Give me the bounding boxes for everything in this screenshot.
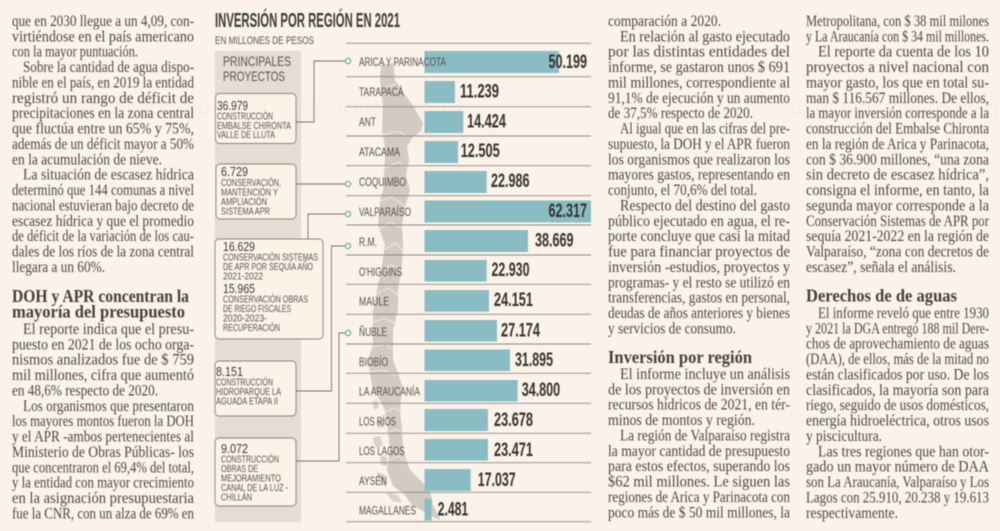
callout: Valparaíso projects: 2020-2023-: [223, 312, 267, 324]
region labels: LOS RÍOS: [359, 414, 396, 428]
bar values: 14.424: [467, 112, 506, 132]
bar values: 22.930: [492, 260, 530, 281]
bar values: 62.317: [548, 201, 587, 222]
callout: Canal de la Luz: [215, 438, 296, 506]
body text: column 1 upper: registró un rango de déficit de: [12, 90, 194, 107]
body text: column 3 upper: conjunto, el 70,6% del total.: [608, 182, 757, 199]
region labels: ANT: [359, 115, 376, 129]
body text: column 3 upper: Respecto del destino del gasto: [620, 197, 790, 214]
body text: column 1 upper: nacional estuvieran bajo decreto de: [12, 197, 194, 214]
body text: column 3 upper: de 37,5% respecto de 2020.: [608, 105, 753, 122]
body text: column 4 upper: El reporte da cuenta de los 10: [818, 44, 989, 61]
map of Chile: [368, 63, 441, 521]
connector: Ñuble: [296, 330, 351, 461]
horizontal rules: [346, 43, 591, 522]
connector: R.M.: [296, 243, 351, 391]
body text: column 1 upper: [12, 13, 194, 276]
body text: column 4 lower: [806, 305, 990, 522]
connector: Coquimbo: [296, 181, 351, 187]
body text: column 3 upper: los organismos que realizaron los: [608, 151, 790, 168]
region labels: AYSÉN: [359, 473, 387, 488]
callout: Sistema APR: AMPLIACIÓN: [221, 195, 267, 208]
callout: Hidroparque La Aguada: 8.151: [216, 365, 243, 379]
callout: Valparaíso projects: 15.965: [223, 282, 255, 296]
callout: Embalse Chironta: EMBALSE CHIRONTA: [217, 120, 291, 132]
region labels: COQUIMBO: [359, 175, 406, 189]
bar values: [438, 52, 587, 521]
callout: Sistema APR: [216, 164, 296, 219]
region labels: LA ARAUCANÍA: [359, 384, 420, 398]
body text: column 1 upper: precipitaciones en la zona central: [12, 105, 194, 122]
region labels: VALPARAÍSO: [359, 204, 411, 219]
heading: Derechos de aguas: Derechos de de aguas: [806, 286, 957, 306]
body text: column 1 lower: Los organismos que presentaron: [23, 398, 194, 415]
body text: column 4 upper: escasez”, señala el análisis.: [806, 259, 956, 276]
chart subtitle: EN MILLONES DE PESOS: [215, 35, 314, 47]
region labels: ÑUBLE: [359, 325, 387, 339]
bar values: 12.505: [461, 141, 500, 162]
callout: Embalse Chironta: 36.979: [217, 99, 248, 113]
body text: column 1 lower: puesto en 2021 de los ocho orga-: [12, 336, 194, 353]
callout: Valparaíso projects: [215, 239, 323, 339]
callout: Canal de la Luz: OBRAS DE: [221, 463, 258, 475]
body text: column 1 upper: determinó que 144 comunas a nivel: [12, 182, 194, 199]
callout: Valparaíso projects: 2021-2022: [223, 270, 263, 282]
body text: column 3 upper: comparación a 2020.: [608, 13, 721, 30]
body text: column 1 lower: los mayores montos fueron la DOH: [12, 413, 194, 430]
body text: column 3 upper: Al igual que en las cifras del pre-: [620, 121, 790, 138]
body text: column 3 upper: fue para financiar proyectos de: [608, 244, 790, 261]
body text: column 3 lower: la mayor cantidad de presupuesto: [608, 443, 790, 460]
region labels: R.M.: [359, 235, 377, 249]
callout: Embalse Chironta: [216, 94, 296, 144]
body text: column 3 lower: regiones de Arica y Parinacota con: [608, 489, 790, 506]
infographic: inversión por región: [215, 8, 591, 522]
body text: column 1 upper: nible en el país, en 2019 la entidad: [12, 74, 194, 92]
body text: column 1 upper: de déficit de la variación de los cau-: [12, 228, 194, 245]
text column 4: [806, 13, 990, 522]
callout: Hidroparque La Aguada: CONSTRUCCIÓN: [216, 376, 273, 388]
body text: column 1 lower: mil millones, cifra que aumentó: [12, 367, 194, 384]
body text: column 1 upper: que en 2030 llegue a un 4,09, con-: [12, 13, 194, 30]
bar values: 50.199: [548, 52, 587, 73]
callout: Embalse Chironta: CONSTRUCCIÓN: [217, 110, 273, 122]
body text: column 3 lower: [608, 366, 790, 521]
body text: column 1 upper: La situación de escasez hídrica: [23, 167, 194, 184]
body text: column 4 lower: y piscicultura.: [806, 428, 882, 445]
bar values: 24.151: [494, 290, 533, 311]
body text: column 3 lower: $62 mil millones. Le siguen las: [608, 474, 790, 491]
region labels: [359, 55, 446, 518]
body text: column 1 upper: llegara a un 60%.: [12, 259, 105, 276]
body text: column 1 lower: [12, 321, 194, 522]
body text: column 3 upper: transferencias, gastos en personal,: [608, 290, 790, 307]
body text: column 1 upper: en la acumulación de nieve.: [12, 151, 162, 168]
callout: Sistema APR: MANTENCIÓN Y: [221, 186, 278, 198]
callout: Canal de la Luz: CANAL DE LA LUZ -: [221, 482, 288, 494]
body text: column 3 upper: deudas de años anteriores y bienes: [608, 305, 790, 322]
callout: Sistema APR: CONSERVACIÓN,: [221, 176, 281, 189]
body text: column 3 lower: para estos efectos, superando los: [608, 458, 790, 475]
body text: column 1 upper: Sobre la cantidad de agua dispo-: [23, 59, 194, 76]
callout: Valparaíso projects: CONSERVACIÓN SISTEMAS: [223, 250, 318, 264]
panel heading: principales proyectos: PRINCIPALES: [223, 53, 291, 69]
callout: Valparaíso projects: DE APR POR SEQUÍA AÑO: [223, 260, 313, 273]
body text: column 1 lower: y la entidad con mayor crecimiento: [12, 475, 194, 492]
bar values: 17.037: [478, 470, 516, 491]
body text: column 4 upper: segunda mayor corresponde a la: [806, 197, 989, 214]
body text: column 3 upper: inversión -estudios, proyectos y: [608, 259, 790, 276]
bar values: 11.239: [460, 82, 499, 102]
chart title: INVERSIÓN POR REGIÓN EN 2021: [215, 8, 400, 32]
body text: column 1 upper: que fluctúa entre un 65% y 75%,: [12, 121, 194, 138]
text: diariofinanciero #tag: [790, 95, 1000, 122]
bar values: 31.895: [515, 350, 553, 371]
panel heading: principales proyectos: PROYECTOS: [223, 68, 285, 84]
heading: DOH y APR: DOH y APR concentran la: [12, 286, 189, 306]
text column 3: [608, 13, 790, 521]
region labels: ATACAMA: [359, 145, 400, 159]
body text: column 4 upper: proyectos a nivel nacional con: [806, 59, 989, 76]
callout: Embalse Chironta: VALLE DE LLUTA: [217, 129, 275, 141]
callout: Hidroparque La Aguada: HIDROPARQUE LA: [216, 386, 281, 398]
connector: Arica y Parinacota: [296, 58, 351, 122]
panel: principales proyectos background: [215, 51, 301, 522]
body text: column 1 lower: que concentraron el 69,4% del total,: [12, 459, 194, 476]
body text: column 3 lower: minos de montos y región.: [608, 412, 755, 429]
text column 1: [12, 13, 194, 522]
heading: Inversión por región: Inversión por región: [608, 347, 752, 367]
callout: Valparaíso projects: DE RIEGO FISCALES: [223, 303, 291, 315]
body text: column 1 lower: El reporte indica que el presu-: [23, 321, 194, 338]
body text: column 3 upper: por las distintas entidades del: [608, 44, 790, 61]
body text: column 1 lower: y el APR -ambos pertenecientes al: [12, 429, 194, 446]
body text: column 1 upper: virtiéndose en el país americano: [12, 28, 194, 45]
body text: column 1 upper: además de un déficit mayor a 50%: [12, 136, 194, 153]
body text: column 3 upper: público ejecutado en agua, el re-: [608, 213, 790, 230]
callout: Canal de la Luz: MEJORAMIENTO: [221, 472, 281, 484]
region labels: ARICA Y PARINACOTA: [359, 55, 446, 69]
body text: column 3 upper: mayores gastos, representando en: [608, 167, 790, 184]
body text: column 3 lower: La región de Valparaíso registra: [620, 428, 790, 444]
callout: Canal de la Luz: CONSTRUCCIÓN: [221, 452, 279, 466]
body text: column 3 upper: informe, se gastaron unos $ 691: [608, 59, 790, 76]
callout: Sistema APR: 6.729: [221, 165, 248, 179]
bars: [424, 51, 591, 520]
bar values: 27.174: [501, 320, 540, 342]
heading: DOH y APR: [12, 286, 189, 322]
body text: column 3 upper: mil millones, correspondiente al: [608, 74, 790, 92]
body text: column 3 upper: programas- y el resto se utilizó en: [608, 274, 790, 291]
region labels: LOS LAGOS: [359, 444, 405, 458]
body text: column 3 upper: y servicios de consumo.: [608, 320, 736, 337]
region labels: TARAPACÁ: [359, 84, 404, 99]
callout: Sistema APR: SISTEMA APR: [221, 206, 270, 218]
body text: column 1 upper: dales de los ríos de la zona central: [12, 244, 194, 261]
body text: column 1 lower: nismos analizados fue de $ 759: [12, 352, 194, 369]
body text: column 1 lower: en la asignación presupuestaria: [12, 490, 194, 507]
body text: column 3 upper: 91,1% de ejecución y un aumento: [608, 90, 790, 107]
body text: column 3 upper: porte concluye que casi la mitad: [608, 228, 790, 245]
bar chart: [359, 51, 591, 521]
callout: Valparaíso projects: CONSERVACIÓN OBRAS: [223, 292, 308, 306]
body text: column 1 upper: con la mayor puntuación.: [12, 44, 138, 61]
body text: column 3 upper: [608, 13, 790, 337]
body text: column 3 lower: de los proyectos de inversión en: [608, 381, 790, 398]
body text: column 4 lower: respectivamente.: [806, 505, 898, 522]
heading: DOH y APR: mayoría del presupuesto: [12, 302, 185, 322]
text: diariofinanciero: [60, 95, 210, 122]
bar values: 23.678: [494, 410, 533, 431]
connector: Valparaíso: [308, 211, 351, 239]
callout: Valparaíso projects: RECUPERACIÓN: [223, 321, 280, 334]
body text: column 3 upper: En relación al gasto ejecutado: [620, 28, 790, 45]
body text: column 3 lower: El informe incluye un análisis: [620, 366, 790, 383]
body text: column 3 lower: recursos hídricos de 2021, en tér-: [608, 397, 790, 414]
body text: column 3 upper: supuesto, la DOH y el APR fueron: [608, 136, 790, 153]
bar values: 22.986: [491, 171, 530, 192]
region labels: MAGALLANES: [359, 504, 416, 518]
text: gonzalek@e-clip.cl: [222, 95, 462, 122]
body text: column 1 lower: Ministerio de Obras Públicas- los: [12, 444, 194, 461]
body text: column 4 upper: sin decreto de escasez hídrica”,: [806, 167, 989, 184]
body text: column 1 lower: en 48,6% respecto de 2020.: [12, 382, 158, 400]
body text: column 1 lower: fue la CNR, con un alza de 69% en: [12, 505, 194, 522]
bar values: 2.481: [438, 500, 468, 521]
callout: Hidroparque La Aguada: [215, 361, 296, 416]
body text: column 4 upper: consigna el informe, en tanto, la: [806, 182, 989, 199]
region labels: O'HIGGINS: [359, 265, 402, 279]
callout: Hidroparque La Aguada: AGUADA ETAPA II: [216, 396, 278, 408]
callout: Canal de la Luz: 9.072: [221, 442, 248, 456]
body text: column 1 upper: escasez hídrica y que el promedio: [12, 213, 194, 230]
panel heading: principales proyectos: [223, 53, 291, 84]
callout: Canal de la Luz: CHILLÁN: [221, 490, 252, 504]
body text: column 4 upper: [806, 13, 990, 276]
body text: column 3 lower: poco más de $ 50 mil millones, la: [608, 504, 790, 521]
region labels: MAULE: [359, 294, 389, 308]
region labels: BIOBÍO: [359, 354, 388, 369]
bar values: 34.800: [522, 380, 560, 401]
bar values: 38.669: [535, 230, 574, 252]
bar values: 23.471: [494, 440, 533, 461]
callout: Valparaíso projects: 16.629: [223, 240, 255, 254]
